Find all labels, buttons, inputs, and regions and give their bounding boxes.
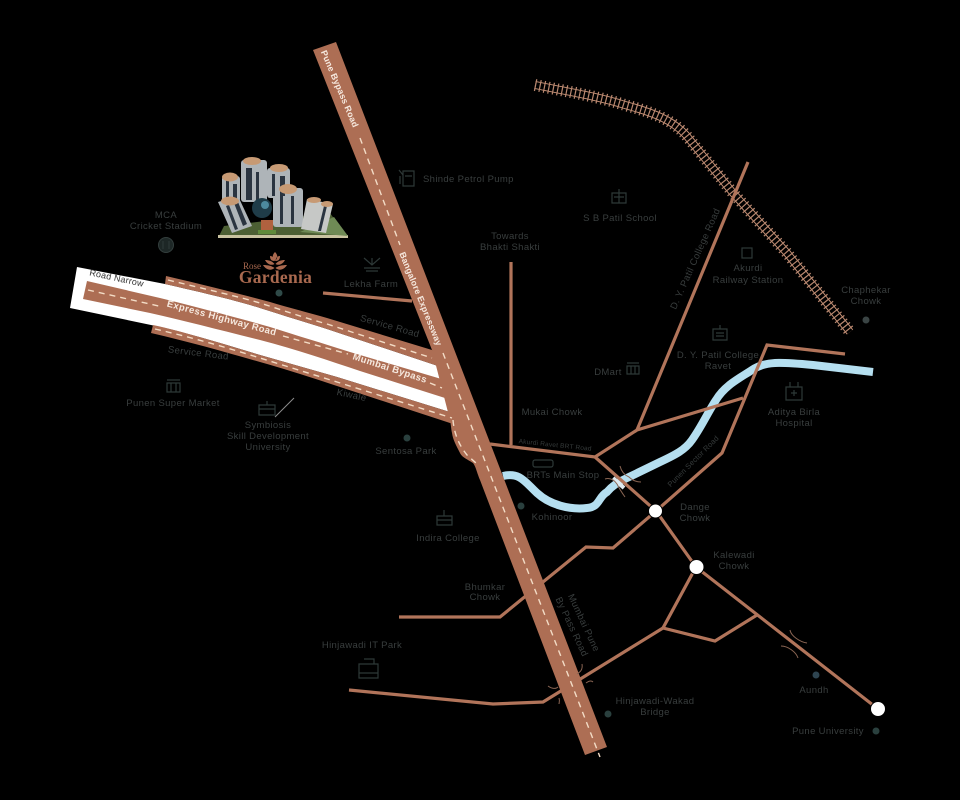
Chaphekar Chowk	[841, 285, 891, 324]
Indira College	[416, 510, 480, 544]
Hinjawadi-Wakad Bridge	[604, 696, 694, 718]
Pune University: Pune University	[792, 726, 864, 737]
MCA Cricket Stadium	[130, 210, 202, 252]
Ravet Sector Road label: Punen Sector Road	[666, 434, 721, 489]
Aditya Birla Hospital: Hospital	[775, 418, 813, 429]
Kohinoor: Kohinoor	[532, 512, 572, 523]
road label: Road Narrow: Road Narrow	[89, 267, 145, 289]
Service Road lower label: Service Road	[167, 344, 229, 363]
Mukai Chowk: Mukai Chowk	[522, 407, 582, 418]
express highway: centre road	[83, 281, 460, 405]
Bhumkar Chowk: Chowk	[470, 592, 500, 603]
Kiwale label: Kiwale	[336, 387, 367, 404]
Service Road upper label: Service Road	[359, 313, 421, 340]
bridge over river	[605, 466, 641, 497]
bridge markers near Aundh	[781, 630, 807, 658]
Towards Bhakti Shakti: Towards	[491, 231, 529, 242]
Pune University junction	[870, 702, 886, 716]
express highway: upper service road	[165, 276, 445, 368]
express highway: white carriageways	[70, 267, 458, 417]
Dange Chowk: Chowk	[680, 513, 710, 524]
river	[503, 363, 873, 508]
Mumbai Pune By Pass Road label: By Pass Road	[553, 595, 590, 658]
Towards Bhakti Shakti	[480, 231, 540, 253]
highway bridge markers	[548, 664, 593, 704]
DMart	[594, 363, 639, 378]
logo: Rose Gardenia: Gardenia	[239, 267, 312, 287]
BRTs Main Stop	[527, 460, 599, 481]
Akurdi Railway Station	[713, 248, 783, 286]
Shinde Petrol Pump	[399, 170, 514, 186]
railway line	[535, 85, 850, 332]
Hinjawadi-Wakad Bridge: Bridge	[640, 707, 670, 718]
Symbiosis Skill Development University: Symbiosis	[245, 420, 291, 431]
DMart: DMart	[594, 367, 622, 378]
D. Y. Patil College Ravet: D. Y. Patil College	[677, 350, 759, 361]
project building render	[218, 157, 348, 238]
Kalewadi Chowk: Kalewadi	[713, 550, 755, 561]
Punen Super Market	[126, 380, 220, 409]
S B Patil School: S B Patil School	[583, 213, 657, 224]
main bypass road	[313, 42, 607, 755]
logo: Rose Gardenia	[239, 252, 312, 287]
Symbiosis Skill Development University: Skill Development	[227, 431, 309, 442]
road label: Pune Bypass Road: Pune Bypass Road	[319, 49, 361, 129]
road label: Bangalore Expressway: Bangalore Expressway	[397, 250, 444, 347]
Chaphekar Chowk: Chowk	[851, 296, 881, 307]
Symbiosis Skill Development University	[227, 398, 309, 453]
D. Y. Patil College Road label: D. Y. Patil College Road	[668, 207, 723, 311]
Indira College: Indira College	[416, 533, 480, 544]
Dange Chowk	[648, 502, 710, 524]
Sentosa Park: Sentosa Park	[375, 446, 437, 457]
MCA Cricket Stadium: Cricket Stadium	[130, 221, 202, 232]
Mumbai Pune By Pass Road label: Mumbai Pune	[565, 592, 601, 654]
Kohinoor	[518, 502, 572, 523]
Shinde Petrol Pump: Shinde Petrol Pump	[423, 174, 514, 185]
Akurdi Ravet BRT Road label: Akurdi Ravet BRT Road	[518, 438, 592, 453]
Lekha Farm	[344, 258, 398, 290]
project location dot	[276, 290, 282, 296]
MCA Cricket Stadium: MCA	[155, 210, 177, 221]
express highway: lower service road	[151, 325, 460, 426]
Kalewadi Chowk	[689, 550, 755, 574]
Aditya Birla Hospital	[768, 382, 820, 429]
Dange Chowk: Dange	[680, 502, 710, 513]
Hinjawadi IT Park	[322, 640, 402, 678]
Hinjawadi-Wakad Bridge: Hinjawadi-Wakad	[616, 696, 694, 707]
BRTs Main Stop: BRTs Main Stop	[527, 470, 599, 481]
Towards Bhakti Shakti: Bhakti Shakti	[480, 242, 540, 253]
Sentosa Park	[375, 434, 437, 457]
Aundh	[799, 672, 829, 696]
logo: Rose Gardenia: Rose	[243, 261, 261, 271]
road label: Mumbai Bypass: Mumbai Bypass	[351, 351, 428, 386]
D. Y. Patil College Ravet	[677, 325, 759, 372]
Symbiosis Skill Development University: University	[245, 442, 291, 453]
S B Patil School	[583, 189, 657, 224]
road dashes	[88, 138, 600, 757]
Lekha Farm: Lekha Farm	[344, 279, 398, 290]
thin road network	[323, 162, 878, 709]
Akurdi Railway Station: Akurdi	[733, 263, 763, 274]
Akurdi Railway Station: Railway Station	[713, 275, 783, 286]
Bhumkar Chowk: Bhumkar	[465, 582, 505, 593]
Aditya Birla Hospital: Aditya Birla	[768, 407, 820, 418]
Kalewadi Chowk: Chowk	[719, 561, 749, 572]
Aundh: Aundh	[799, 685, 829, 696]
road label: Express Highway Road: Express Highway Road	[166, 299, 278, 339]
Hinjawadi IT Park: Hinjawadi IT Park	[322, 640, 402, 651]
Chaphekar Chowk: Chaphekar	[841, 285, 891, 296]
Bhumkar Chowk	[465, 582, 505, 603]
D. Y. Patil College Ravet: Ravet	[705, 361, 731, 372]
Punen Super Market: Punen Super Market	[126, 398, 220, 409]
